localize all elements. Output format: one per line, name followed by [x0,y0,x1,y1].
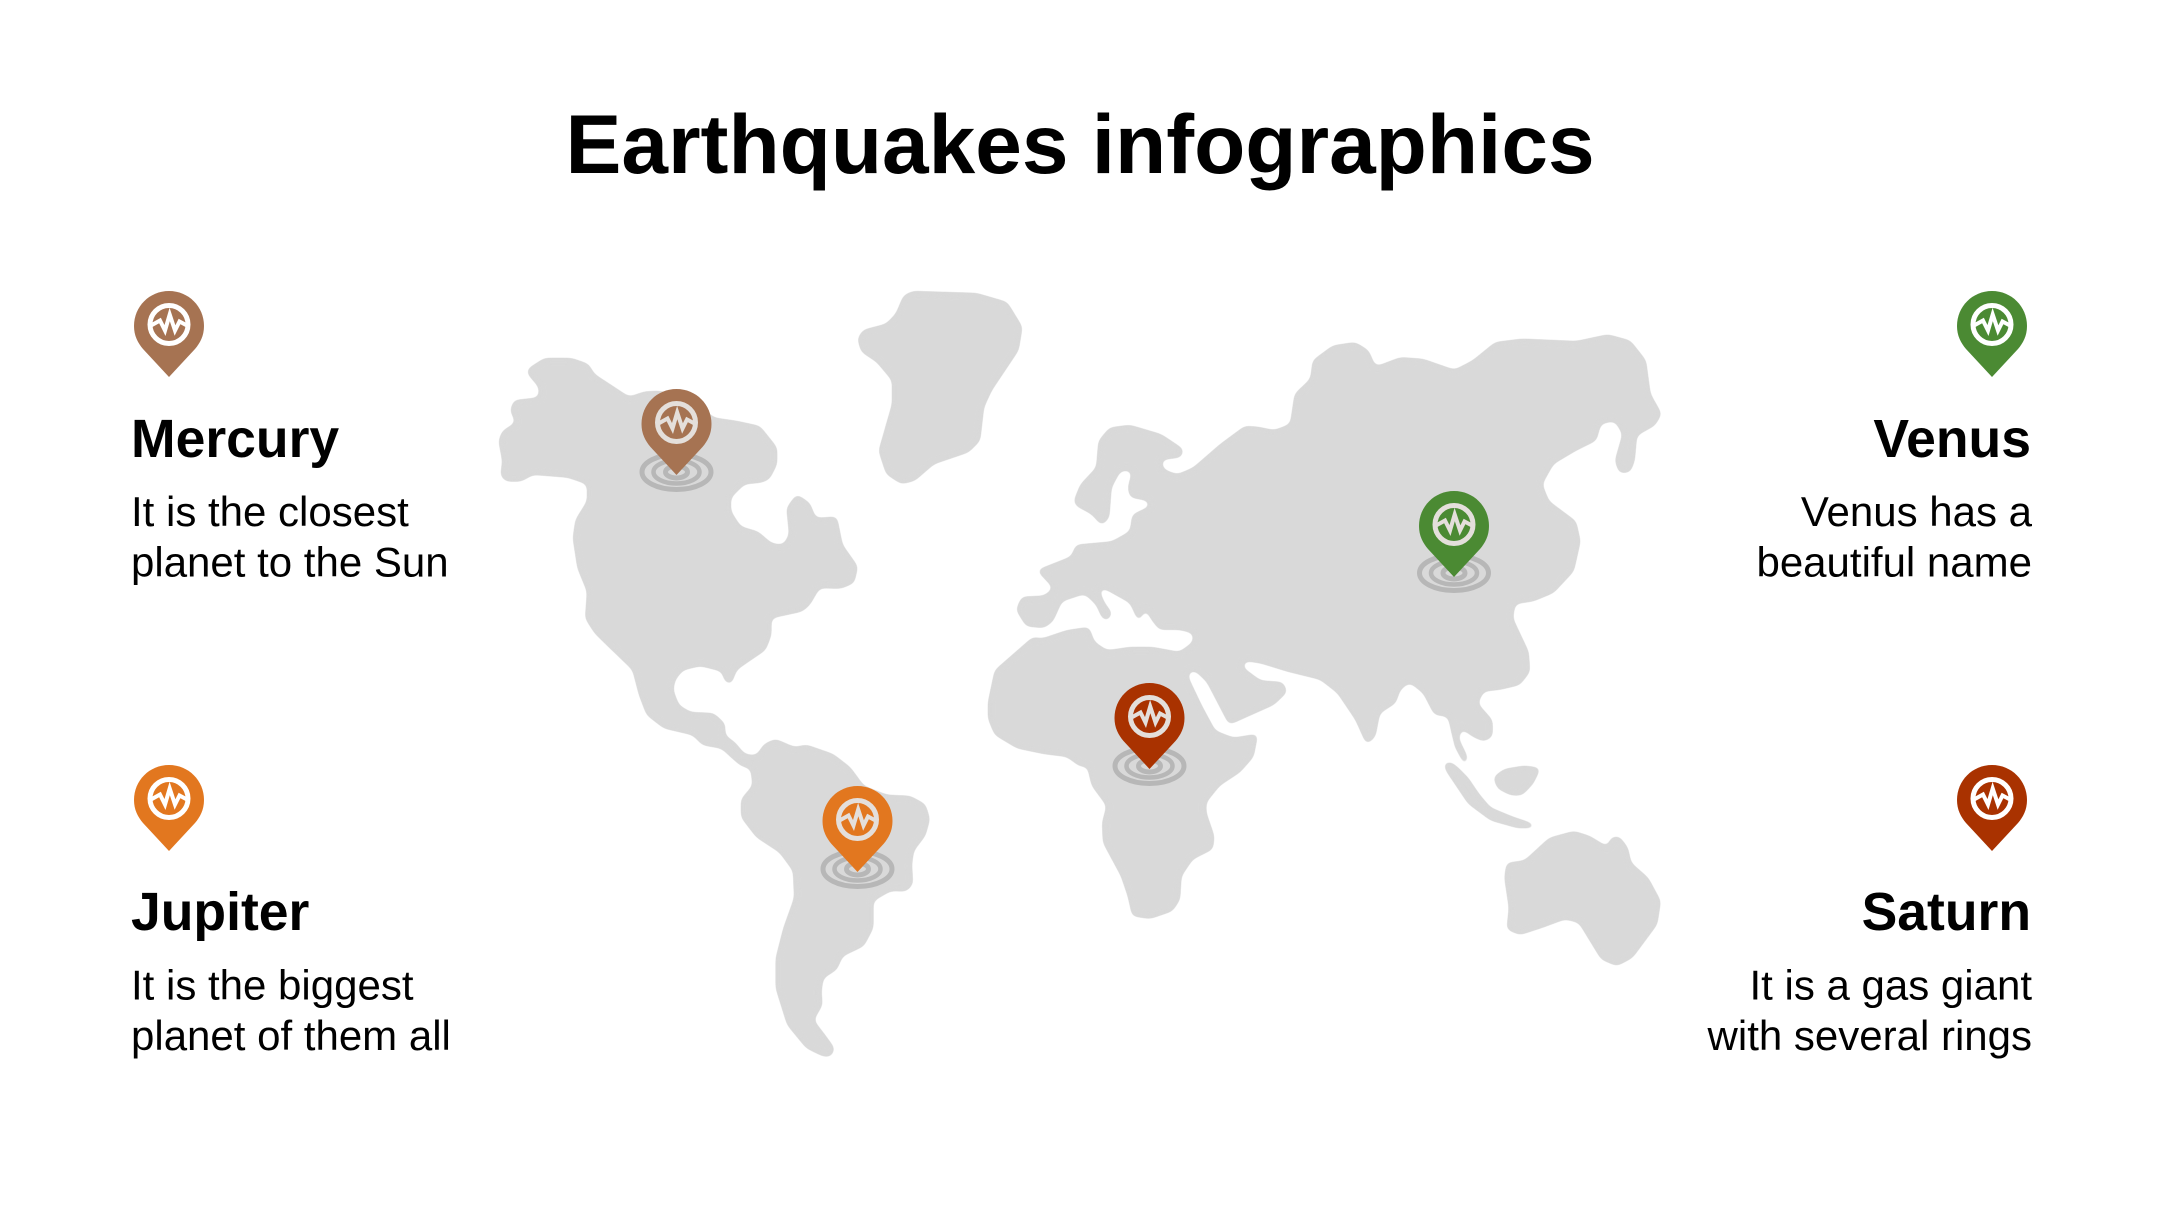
panel: Venus: beautiful name [1756,538,2032,586]
panel: Venus: Venus has a [1801,488,2033,535]
panel: Mercury [131,291,449,586]
panel: Jupiter: Jupiter [131,883,310,942]
panel: Mercury: planet to the Sun [131,538,449,586]
panel: Saturn [1707,765,2032,1059]
panel: Mercury: Mercury [131,410,339,469]
panel: Mercury: It is the closest [131,488,409,535]
panel: Jupiter: It is the biggest [131,962,414,1008]
title: Earthquakes infographics [565,97,1595,191]
map marker: Africa (dark red) [1114,683,1184,784]
panel: Venus [1756,291,2033,586]
continent: Australia [1504,831,1661,966]
panel: Jupiter: planet of them all [131,1012,451,1059]
map marker: Asia (green) [1419,491,1489,590]
panel: Saturn: Saturn [1862,883,2031,942]
map marker: North America (brown) [642,389,712,490]
continent: Eurasia and Africa [988,334,1662,919]
map marker: South America (orange) [822,786,892,886]
continent: Americas [498,358,930,1057]
continent: Greenland [857,291,1023,484]
panel: Saturn: It is a gas giant [1750,962,2032,1008]
panel: Saturn: with several rings [1707,1012,2032,1059]
panel: Jupiter [131,765,451,1059]
panel: Venus: Venus [1873,410,2031,469]
world map [498,291,1662,1057]
continent: Sumatra and Java [1443,762,1535,828]
continent: Borneo [1493,765,1541,796]
